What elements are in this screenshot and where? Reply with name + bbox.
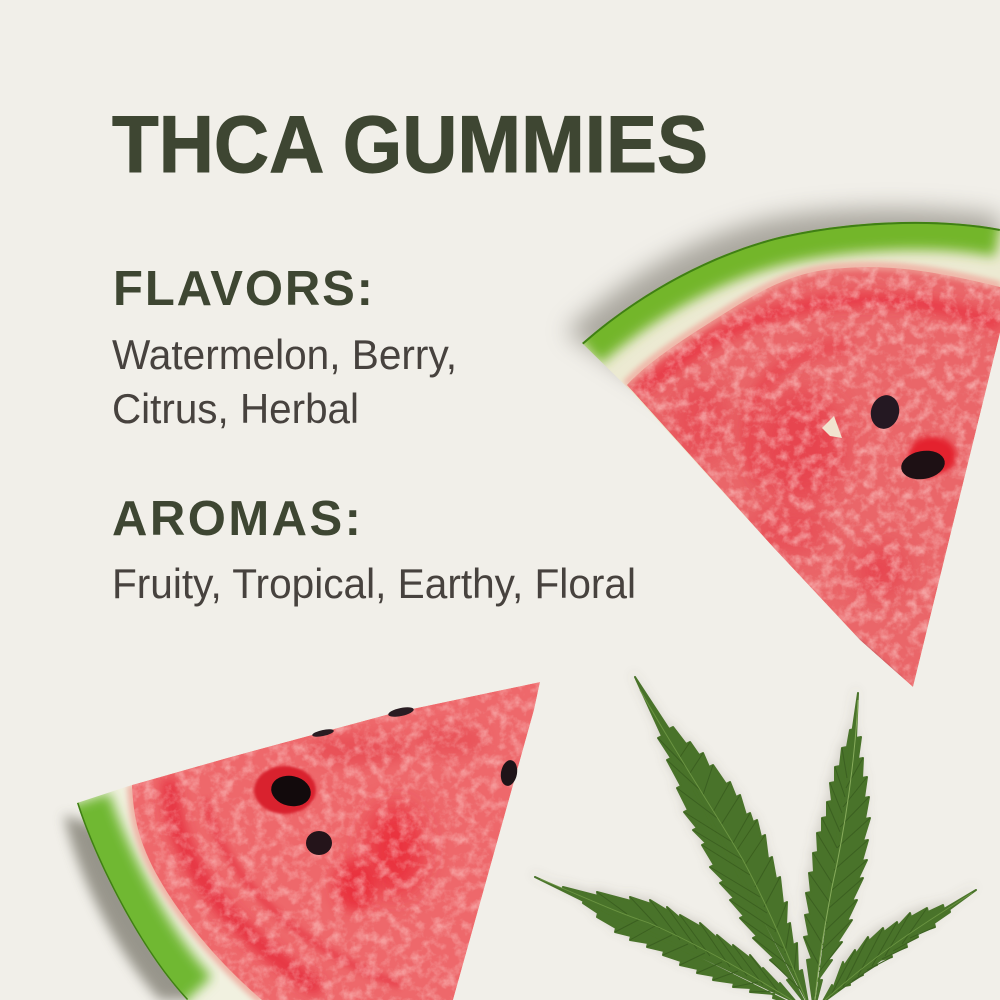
title: THCA GUMMIES xyxy=(112,100,708,190)
slice rind and flesh xyxy=(570,210,1000,700)
text: aromas list: Fruity, Tropical, Earthy, Floral xyxy=(112,560,636,607)
icon: cannabis leaf xyxy=(535,677,976,1000)
watermelon slice: bottom left xyxy=(64,680,550,1000)
slice rind and flesh xyxy=(70,680,550,1000)
heading: aromas: AROMAS: xyxy=(112,492,361,546)
watermelon slice: top right xyxy=(566,209,1000,700)
leaflet: far right xyxy=(822,890,976,1000)
leaflet: center left xyxy=(635,677,808,1000)
seeds xyxy=(822,392,956,483)
slice shadow xyxy=(64,815,215,1000)
leaflet: center right xyxy=(804,693,870,1000)
text: flavors list: Citrus, Herbal xyxy=(112,385,359,432)
text: flavors list: Watermelon, Berry, xyxy=(112,331,457,378)
leaflet: far left xyxy=(535,877,797,1000)
slice shadow xyxy=(566,209,1000,420)
heading: flavors: FLAVORS: xyxy=(113,262,373,316)
seeds xyxy=(254,705,519,855)
text: flavors list xyxy=(112,331,457,432)
